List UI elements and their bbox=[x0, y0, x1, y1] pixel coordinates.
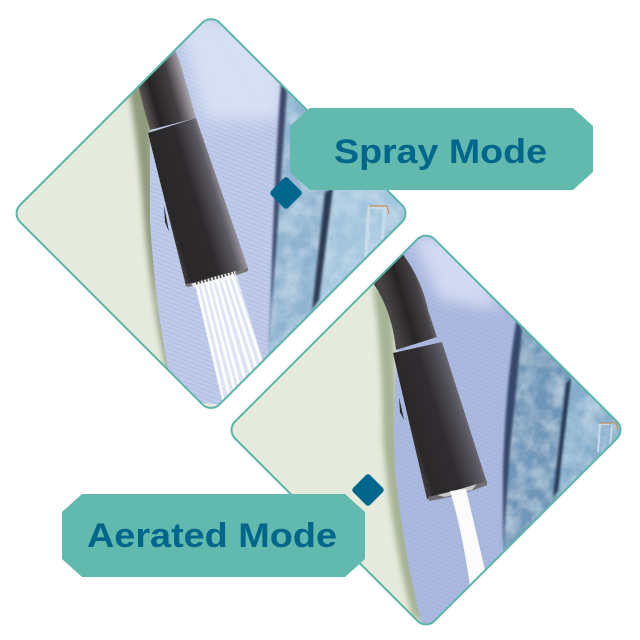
lavender shirt bbox=[394, 236, 518, 624]
label: spray mode: Spray Mode bbox=[334, 133, 547, 171]
nozzle ring bbox=[186, 268, 248, 287]
label: aerated mode bbox=[62, 494, 365, 577]
denim pocket bbox=[598, 423, 616, 452]
marker: aerated mode diamond bbox=[351, 473, 385, 507]
panel: spray mode photo bbox=[16, 18, 406, 409]
denim jacket bbox=[268, 91, 332, 354]
faucet spray head bbox=[148, 118, 248, 286]
marker: spray mode diamond bbox=[269, 176, 303, 210]
spray streams bbox=[196, 273, 264, 402]
faucet spray head bbox=[393, 342, 487, 499]
panel border bbox=[12, 14, 410, 413]
panel border bbox=[227, 231, 625, 629]
wall shadow bbox=[127, 88, 168, 369]
label: aerated mode: Aerated Mode bbox=[87, 517, 337, 555]
side button bbox=[399, 397, 404, 420]
lavender shirt bbox=[150, 20, 281, 404]
wall background bbox=[232, 284, 422, 622]
denim jacket bbox=[503, 325, 572, 551]
nozzle ring bbox=[428, 481, 487, 501]
wall shadow bbox=[372, 285, 425, 625]
denim pocket stitching bbox=[366, 207, 388, 258]
label: spray mode bbox=[290, 108, 593, 190]
water stream bbox=[450, 489, 485, 586]
panel: aerated mode photo bbox=[230, 234, 622, 626]
faucet neck bbox=[373, 253, 437, 350]
side button bbox=[164, 205, 169, 232]
faucet neck bbox=[138, 50, 196, 130]
wall background bbox=[18, 95, 218, 407]
